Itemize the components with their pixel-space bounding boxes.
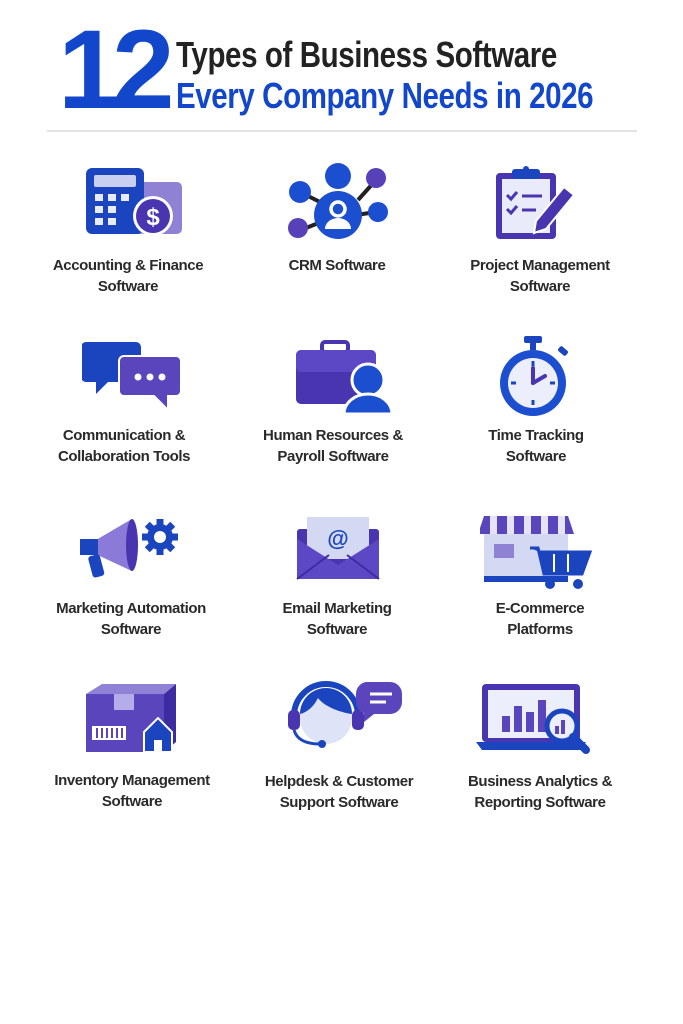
label: inventory: Inventory Management [54, 772, 210, 789]
label: inventory [54, 772, 210, 810]
label: time tracking: Time Tracking [488, 427, 584, 444]
label: helpdesk: Support Software [280, 794, 398, 811]
label: accounting [53, 257, 204, 295]
label: communication: Communication & [63, 427, 185, 444]
label: communication [58, 427, 190, 465]
title text [176, 34, 593, 116]
icon: helpdesk headset [288, 681, 402, 748]
label: email marketing [282, 600, 392, 638]
label: marketing automation: Marketing Automation [56, 600, 206, 617]
icon: briefcase with person [296, 340, 390, 412]
label: time tracking: Software [506, 448, 566, 465]
label: business analytics [468, 773, 612, 811]
title text: Types of Business Software [176, 34, 557, 75]
icon: CRM network [288, 163, 388, 239]
title text: Every Company Needs in 2026 [176, 75, 593, 116]
label: e-commerce: Platforms [507, 621, 573, 638]
label: HR: Human Resources & [263, 427, 403, 444]
label: CRM: CRM Software [289, 257, 385, 274]
label: e-commerce [496, 600, 584, 638]
icon: storefront with cart [480, 516, 592, 589]
label: project management: Software [510, 278, 570, 295]
label: helpdesk [265, 773, 414, 811]
icon: calculator with dollar: $ [146, 204, 160, 231]
label: project management [470, 257, 610, 295]
label: marketing automation [56, 600, 206, 638]
label: email marketing: Email Marketing [282, 600, 392, 617]
label: email marketing: Software [307, 621, 367, 638]
label: accounting: Accounting & Finance [53, 257, 203, 274]
icon: clipboard with pencil [496, 166, 573, 239]
label: helpdesk: Helpdesk & Customer [265, 773, 413, 790]
label: business analytics: Business Analytics & [468, 773, 612, 790]
label: business analytics: Reporting Software [474, 794, 606, 811]
label: inventory: Software [102, 793, 162, 810]
label: communication: Collaboration Tools [58, 448, 190, 465]
label: marketing automation: Software [101, 621, 161, 638]
label: HR [263, 427, 403, 465]
label: accounting: Software [98, 278, 158, 295]
icon: laptop analytics [476, 684, 590, 754]
icon: envelope: @ [327, 526, 349, 551]
label: e-commerce: E-Commerce [496, 600, 584, 617]
icon: box with house [86, 684, 176, 752]
label: HR: Payroll Software [277, 448, 389, 465]
icon: stopwatch [500, 336, 568, 416]
icon: envelope [296, 517, 380, 580]
icon: chat bubbles [82, 342, 180, 408]
title: big number 12: 12 [58, 7, 167, 132]
icon: megaphone with gear [80, 519, 178, 578]
icon: calculator with dollar [86, 168, 182, 234]
label: project management: Project Management [470, 257, 610, 274]
label: time tracking [488, 427, 584, 465]
